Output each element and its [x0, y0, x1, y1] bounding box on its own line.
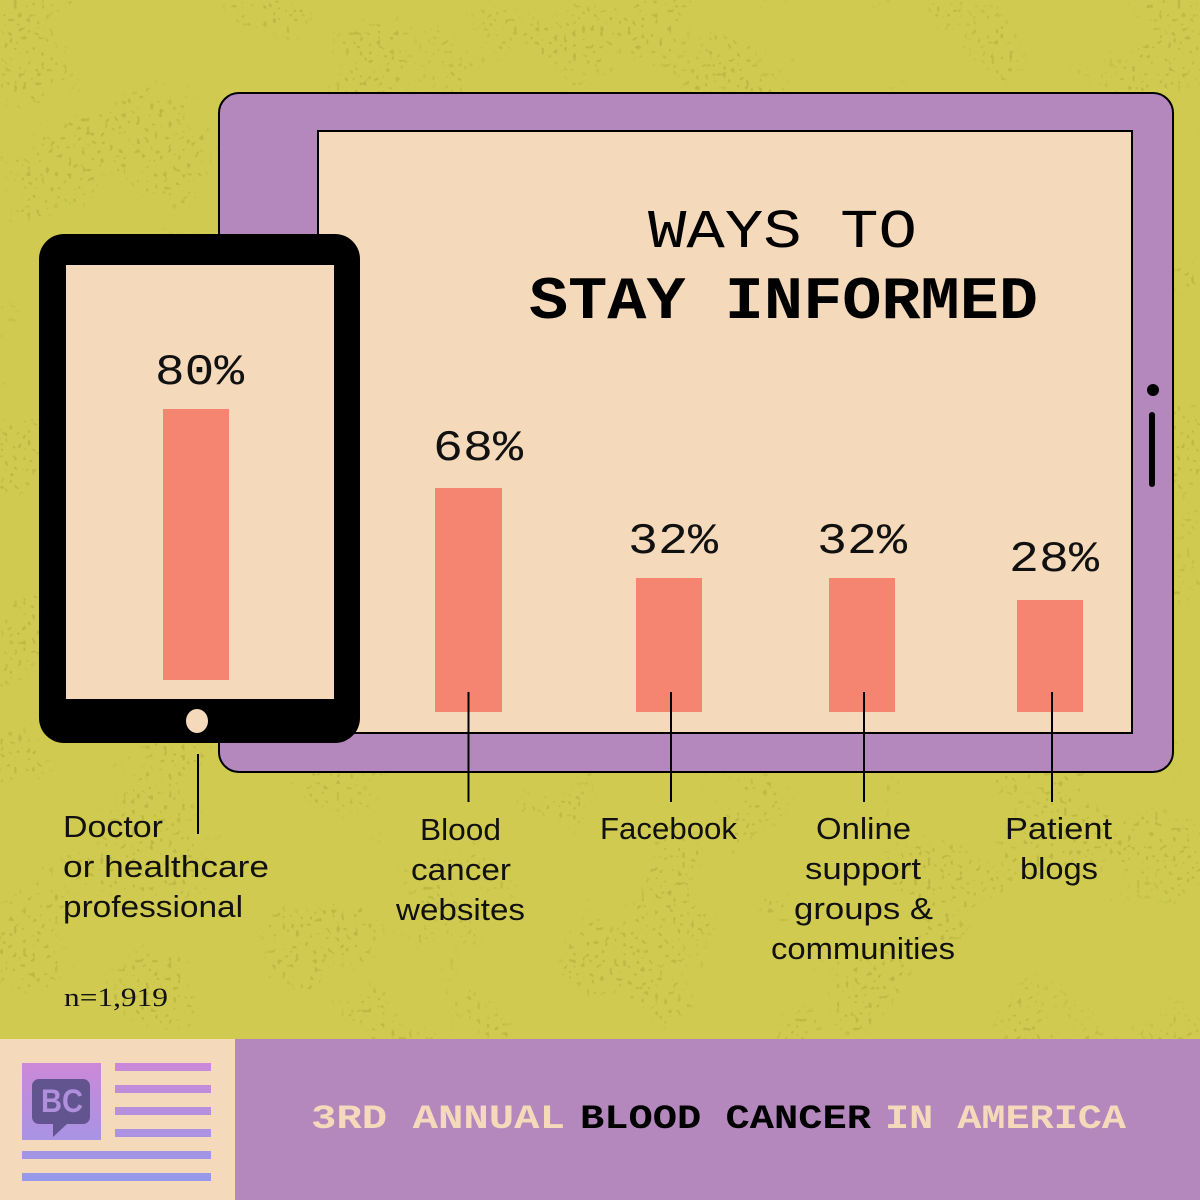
bar: Facebook 32%	[628, 517, 719, 712]
footer band	[235, 1039, 1200, 1200]
footer title: BLOOD CANCER	[580, 1101, 872, 1139]
label: patient blogs: blogs	[1020, 851, 1098, 886]
title: STAY INFORMED	[529, 269, 1038, 337]
tablet camera and side button	[1147, 384, 1159, 487]
title: WAYS TO	[648, 201, 917, 264]
large purple tablet	[219, 93, 1173, 772]
label: doctor or healthcare professional: or healthcare	[63, 849, 269, 884]
BC logo icon	[22, 1063, 101, 1140]
bar: patient blogs 28%	[1009, 535, 1100, 712]
BC logo icon: BC	[41, 1083, 83, 1119]
small black tablet	[39, 234, 360, 743]
leader lines	[198, 692, 1052, 834]
footer title: 3RD ANNUAL	[311, 1101, 565, 1139]
bar: blood cancer websites 68%	[433, 424, 524, 712]
label: doctor or healthcare professional: Doctor	[63, 809, 163, 844]
bar: doctor 80%: 80%	[155, 348, 245, 398]
footer logo panel	[0, 1039, 235, 1200]
label: online support groups and communities: Online	[816, 811, 911, 846]
label: blood cancer websites: cancer	[411, 852, 511, 887]
label: online support groups and communities	[771, 811, 955, 966]
label: blood cancer websites: Blood	[420, 812, 501, 847]
title	[529, 201, 1038, 337]
bar: online support 32%	[817, 517, 908, 712]
document lines	[22, 1063, 211, 1181]
label: patient blogs: Patient	[1005, 811, 1112, 846]
bar: blood cancer websites 68%: 68%	[433, 424, 524, 474]
label: doctor or healthcare professional: professional	[63, 889, 243, 924]
footer title	[311, 1101, 1127, 1139]
label: online support groups and communities: groups &	[794, 891, 933, 926]
bar: patient blogs 28%: 28%	[1009, 535, 1100, 585]
footer title: IN AMERICA	[885, 1101, 1127, 1139]
label: blood cancer websites: websites	[395, 892, 525, 927]
label: online support groups and communities: support	[805, 851, 921, 886]
bar: doctor 80%	[155, 348, 245, 680]
label: online support groups and communities: communities	[771, 931, 955, 966]
sample size note: n=1,919	[64, 983, 168, 1012]
label: Facebook: Facebook	[600, 811, 738, 846]
bar: Facebook 32%: 32%	[628, 517, 719, 567]
bar: online support 32%: 32%	[817, 517, 908, 567]
label: patient blogs	[1005, 811, 1112, 886]
label: blood cancer websites	[395, 812, 525, 927]
label: doctor or healthcare professional	[63, 809, 269, 924]
tablet screen	[318, 131, 1132, 733]
